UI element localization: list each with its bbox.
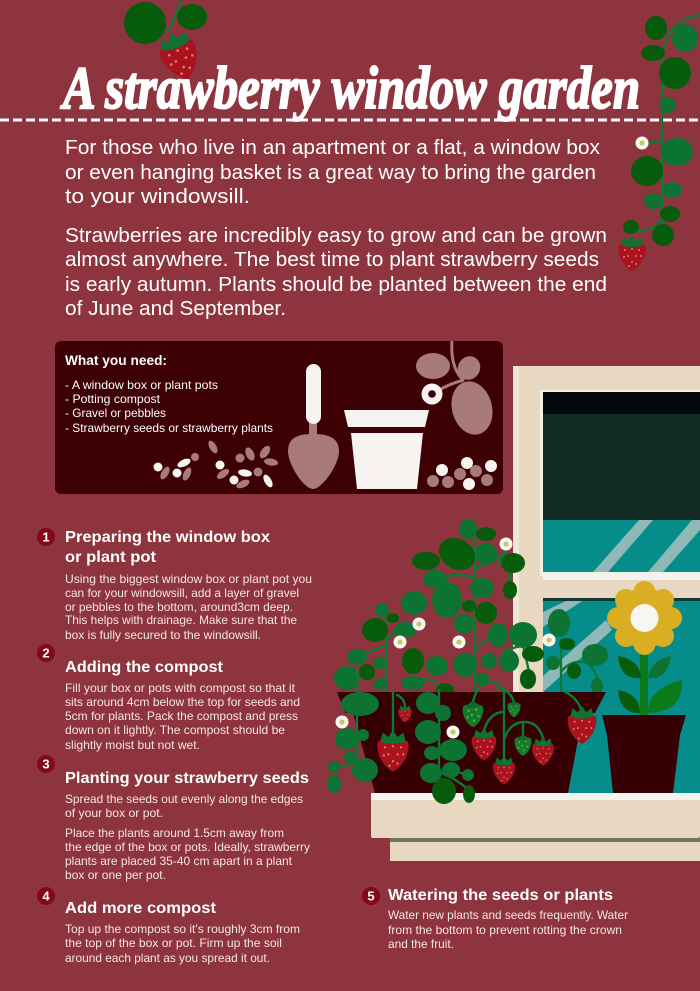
step 1: or plant pot: [65, 549, 157, 566]
step 3: 3: [42, 756, 50, 772]
panel: what you need: [55, 341, 503, 494]
icon: trowel: [288, 364, 339, 489]
step 2: [37, 644, 300, 752]
supplies list: - Strawberry seeds or strawberry plants: [65, 422, 273, 435]
step 3: Spread the seeds out evenly along the edges: [65, 793, 303, 806]
step 4: [37, 887, 300, 965]
intro paragraph 1: For those who live in an apartment or a flat, a window box: [65, 137, 600, 159]
step 3: of your box or pot.: [65, 807, 163, 820]
step 3: the edge of the box or pots. Ideally, strawberry: [65, 841, 310, 854]
step 5: [362, 887, 628, 951]
step 2: 2: [42, 646, 50, 660]
step 1: Preparing the window box: [65, 529, 270, 546]
strawberries and stems: [377, 682, 596, 785]
step 1: 1: [42, 530, 50, 544]
icon: pebbles: [427, 457, 497, 490]
step 5: Water new plants and seeds frequently. Water: [388, 909, 628, 922]
dashed rule: [0, 118, 700, 122]
step 5: Watering the seeds or plants: [388, 887, 613, 904]
step 1: [37, 528, 312, 642]
supplies list: [65, 379, 273, 435]
step 3: Place the plants around 1.5cm away from: [65, 827, 284, 840]
plant in the window: [542, 610, 607, 693]
step 2: sits around 4cm below the top for seeds and: [65, 696, 300, 709]
panel heading: What you need:: [65, 353, 167, 368]
step 4: Add more compost: [65, 900, 217, 917]
intro paragraph 1: [65, 137, 600, 208]
step 3: [37, 755, 310, 882]
step 2: 5cm for plants. Pack the compost and press: [65, 710, 298, 723]
step 2: Adding the compost: [65, 659, 224, 676]
step 5: and the fruit.: [388, 938, 454, 951]
intro paragraph 2: Strawberries are incredibly easy to grow and can be grown: [65, 225, 607, 247]
step 5: 5: [367, 888, 375, 904]
icon: seeds left: [154, 453, 199, 482]
step 3: box or one per pot.: [65, 869, 166, 882]
intro paragraph 2: [65, 225, 607, 320]
icon: plant sprig: [416, 341, 498, 439]
icon: seeds middle: [206, 439, 279, 490]
step 4: 4: [42, 888, 50, 904]
foliage in front of the box: [328, 670, 474, 803]
intro paragraph 2: almost anywhere. The best time to plant strawberry seeds: [65, 249, 599, 271]
step 4: the top of the box or pot. Firm up the soil: [65, 937, 282, 950]
step 1: can for your windowsill, add a layer of gravel: [65, 587, 299, 600]
step 3: Planting your strawberry seeds: [65, 770, 309, 787]
step 2: slightly moist but not wet.: [65, 739, 200, 752]
potted flower: [602, 581, 686, 793]
intro paragraph 2: of June and September.: [65, 298, 286, 320]
icon: plant pot: [344, 410, 429, 489]
window box: [337, 692, 606, 793]
flower head: [607, 581, 682, 655]
intro paragraph 2: is early autumn. Plants should be planted between the end: [65, 274, 607, 296]
intro paragraph 1: or even hanging basket is a great way to bring the garden: [65, 162, 596, 184]
step 5: from the bottom to prevent rotting the crown: [388, 924, 622, 937]
step 2: down on it lightly. The compost should be: [65, 724, 285, 737]
window sill: [371, 793, 700, 861]
sprig with strawberry, top: [125, 0, 206, 85]
step 3: plants are placed 35-40 cm apart in a plant: [65, 855, 293, 868]
vine, top right: [618, 15, 700, 271]
supplies list: - Gravel or pebbles: [65, 407, 166, 420]
window frame: [513, 366, 700, 796]
step 1: or pebbles to the bottom, around3cm deep.: [65, 601, 293, 614]
step 4: Top up the compost so it's roughly 3cm from: [65, 923, 300, 936]
step 1: box is fully secured to the windowsill.: [65, 629, 261, 642]
flower pot: [602, 715, 686, 793]
step 2: Fill your box or pots with compost so that it: [65, 682, 296, 695]
step 4: around each plant as you spread it out.: [65, 952, 270, 965]
step 1: Using the biggest window box or plant pot you: [65, 573, 312, 586]
supplies list: - A window box or plant pots: [65, 379, 218, 392]
foliage behind the box: [335, 520, 543, 696]
supplies list: - Potting compost: [65, 393, 161, 406]
intro paragraph 1: to your windowsill.: [65, 186, 250, 208]
step 1: This helps with drainage. Make sure that the: [65, 614, 297, 627]
